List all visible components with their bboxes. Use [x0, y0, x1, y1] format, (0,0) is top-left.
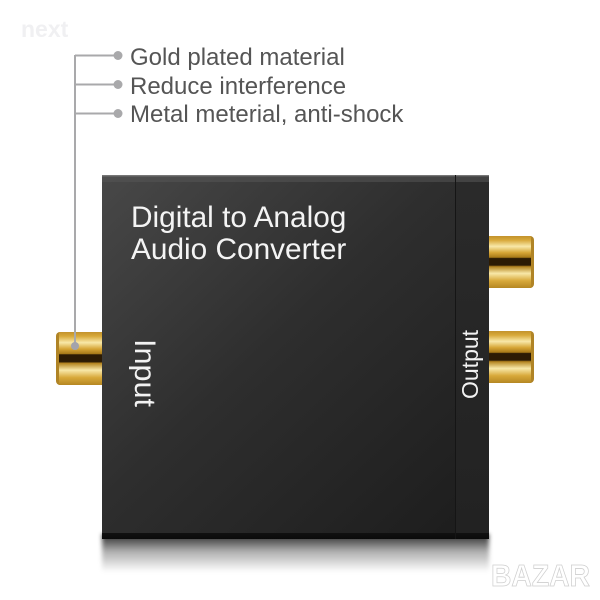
output connector bottom	[489, 331, 534, 383]
input connector	[56, 332, 102, 385]
feature list	[130, 44, 404, 128]
feature list: Reduce interference	[130, 73, 346, 100]
callout leader lines	[71, 51, 122, 350]
watermark: next: next	[21, 16, 69, 42]
title: Digital to Analog Audio Converter	[131, 201, 346, 266]
label: Output: Output	[457, 329, 483, 399]
title: Digital to Analog Audio Converter: Audio Converter	[131, 233, 346, 266]
label: Input: Input	[128, 339, 161, 408]
title: Digital to Analog Audio Converter: Digital to Analog	[131, 201, 346, 234]
device shadow	[102, 534, 489, 572]
feature list: Metal meterial, anti-shock	[130, 101, 404, 128]
converter body	[102, 175, 489, 539]
watermark: Bazar: BAZAR	[491, 558, 590, 593]
output connector top	[489, 236, 534, 288]
feature list: Gold plated material	[130, 44, 345, 71]
